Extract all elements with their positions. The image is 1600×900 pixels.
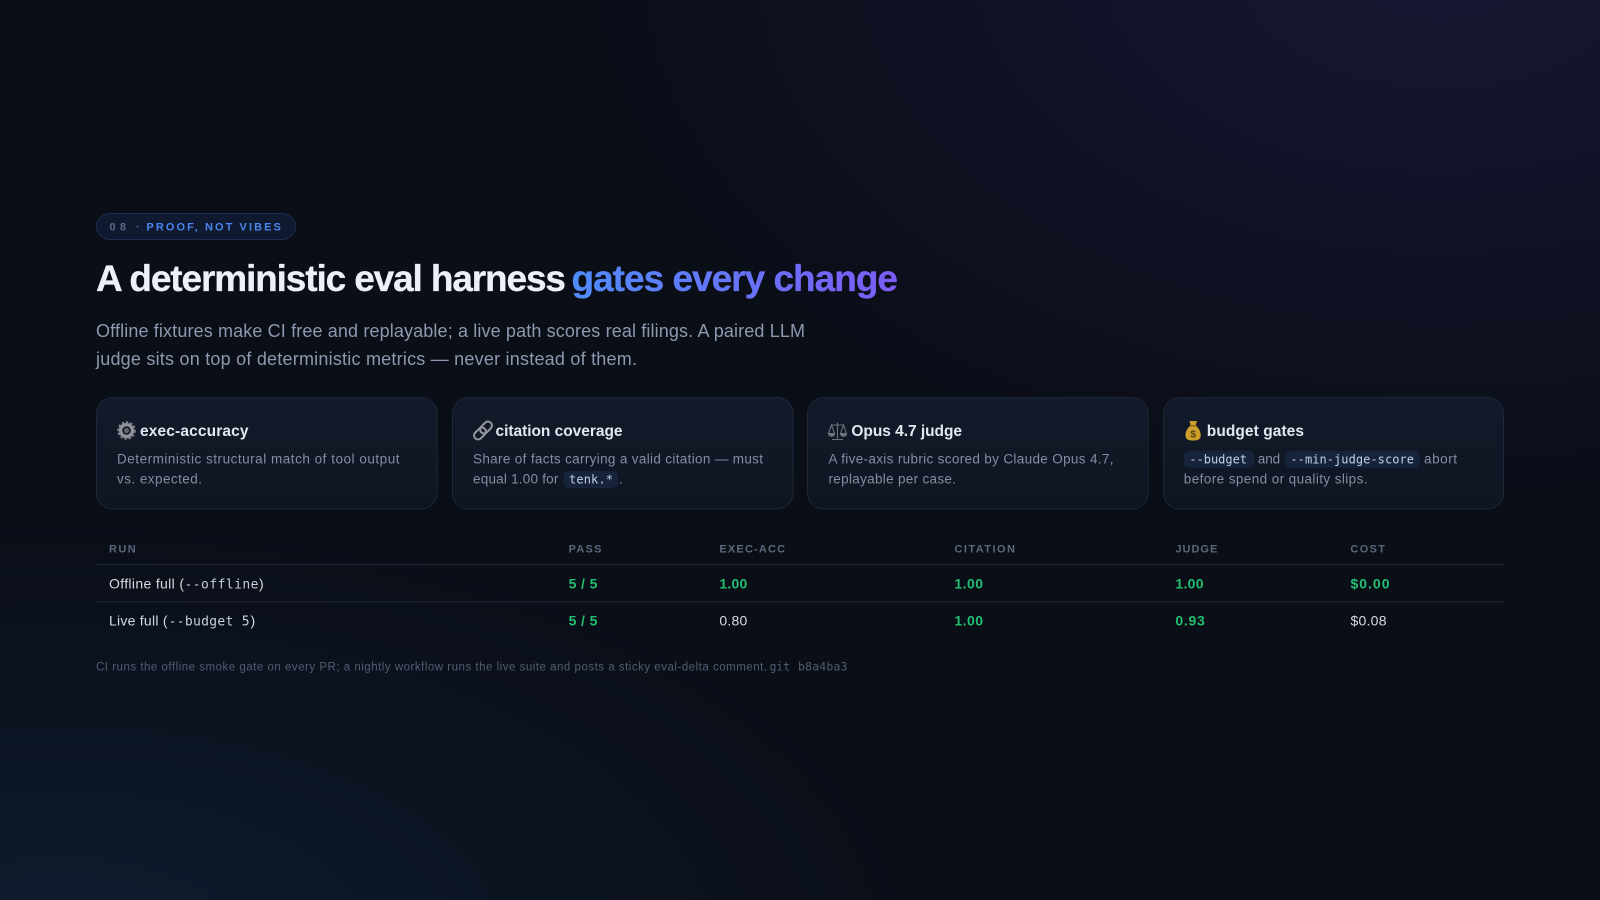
panel: citation coverage: .	[619, 471, 623, 486]
icon: money bag	[1186, 421, 1201, 440]
subtitle: Offline fixtures make CI free and replayable; a live path scores real filings. A paired LLM	[96, 321, 805, 341]
panel: budget gates: abort	[1424, 451, 1457, 466]
panel: Opus 4.7 judge	[808, 398, 1148, 509]
panel: citation coverage: citation coverage	[496, 423, 623, 440]
panel: citation coverage: Share of facts carrying a valid citation — must	[473, 451, 763, 466]
panel: exec-accuracy: exec-accuracy	[140, 423, 249, 440]
table header: RUN	[109, 543, 136, 555]
panel: budget gates: and	[1258, 451, 1280, 466]
panel: exec-accuracy	[96, 398, 437, 509]
inline code: tenk.*	[563, 471, 618, 488]
panel: budget gates: before spend or quality slips.	[1184, 471, 1368, 486]
table row: offline full	[109, 575, 1390, 592]
table row: offline full: $0.00	[1350, 575, 1390, 591]
footnote: b8a4ba3	[798, 659, 848, 673]
section tag pill: ·	[136, 222, 140, 234]
table row: offline full: 1.00	[954, 575, 983, 591]
table row: live full: 1.00	[954, 613, 983, 629]
panel: Opus 4.7 judge: replayable per case.	[828, 471, 956, 486]
section tag pill: PROOF, NOT VIBES	[146, 222, 281, 234]
subtitle	[95, 321, 805, 369]
panel: exec-accuracy: Deterministic structural match of tool output	[117, 451, 400, 466]
inline code: --budget	[1184, 451, 1254, 468]
table header: JUDGE	[1175, 543, 1217, 555]
table row: live full: --budget 5	[169, 615, 250, 630]
table row: live full: 5 / 5	[569, 613, 598, 629]
table header: EXEC-ACC	[719, 543, 785, 555]
table row: live full: Live full (	[109, 613, 168, 629]
title: gates every change	[572, 258, 898, 299]
section tag pill: 08	[110, 222, 126, 234]
table row: live full: )	[250, 613, 255, 629]
table row: offline full: --offline	[184, 577, 259, 592]
footnote: git	[770, 659, 790, 673]
table header	[109, 543, 1385, 555]
table row: live full: 0.93	[1175, 613, 1205, 629]
panel: budget gates	[1164, 398, 1504, 509]
inline code: --min-judge-score: --min-judge-score	[1290, 452, 1414, 466]
table row: offline full: 1.00	[719, 575, 748, 591]
table row: live full: 0.80	[719, 613, 748, 629]
panel: exec-accuracy: vs. expected.	[117, 471, 202, 486]
panel: citation coverage	[452, 398, 793, 509]
panel: Opus 4.7 judge: Opus 4.7 judge	[851, 423, 962, 440]
inline code: tenk.*: tenk.*	[569, 472, 613, 486]
table row: offline full: 5 / 5	[569, 575, 598, 591]
icon: gear	[118, 422, 135, 439]
inline code: --budget: --budget	[1189, 452, 1247, 466]
table header: PASS	[569, 543, 601, 555]
section tag pill	[96, 214, 296, 240]
icon: link	[472, 420, 494, 441]
title	[96, 258, 898, 299]
table header: CITATION	[954, 543, 1015, 555]
table header: COST	[1350, 543, 1385, 555]
panel: citation coverage: equal 1.00 for	[473, 471, 559, 486]
table row: live full: $0.08	[1350, 613, 1387, 629]
table row: live full	[109, 613, 1387, 630]
table row: offline full: 1.00	[1175, 575, 1204, 591]
icon: scales	[828, 422, 846, 440]
footnote: CI runs the offline smoke gate on every PR; a nightly workflow runs the live suite and posts a sticky eval-delta comment.	[96, 661, 767, 673]
panel: budget gates: budget gates	[1207, 423, 1304, 440]
table row: offline full: Offline full (	[109, 575, 184, 591]
table: eval results	[96, 543, 1504, 630]
title: A deterministic eval harness	[96, 258, 566, 299]
panel: Opus 4.7 judge: A five-axis rubric scored by Claude Opus 4.7,	[828, 451, 1114, 466]
subtitle: judge sits on top of deterministic metrics — never instead of them.	[95, 349, 637, 369]
icon: money bag: $	[1190, 428, 1196, 440]
table row: offline full: )	[259, 575, 264, 591]
